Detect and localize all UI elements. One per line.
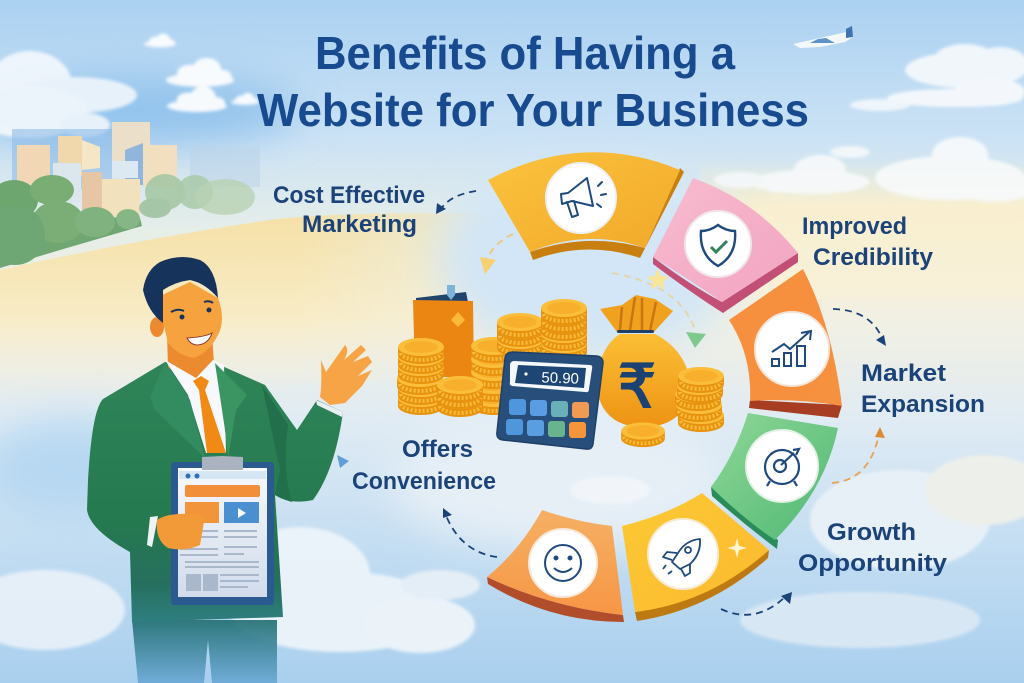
raised hand: [320, 345, 372, 405]
arrow: from rocket: [721, 597, 785, 615]
arrow: center green: [612, 273, 695, 330]
landscape: hills: [0, 213, 469, 368]
background haze behind ring: [390, 160, 740, 550]
lapels: [150, 362, 205, 458]
label: offers convenience: [352, 436, 496, 495]
trousers: [132, 620, 277, 683]
arrow heads: [337, 203, 886, 604]
label: market expansion: [861, 360, 985, 418]
ear: [150, 317, 164, 337]
label: market expansion: Market: [861, 360, 946, 387]
eyes and mouth: [171, 301, 213, 345]
segment: cost effective marketing: [488, 152, 684, 260]
icon: target: [765, 449, 799, 486]
cuff: [316, 400, 343, 417]
arrow: to convenience: [445, 513, 497, 557]
businessman: [87, 257, 372, 683]
dashed arrows: [441, 191, 882, 615]
icon: rocket: [663, 539, 700, 576]
shirt: [165, 360, 226, 453]
title: Benefits of Having a: [315, 27, 735, 79]
label: improved credibility: Improved: [802, 213, 907, 240]
label: offers convenience: Offers: [402, 436, 473, 463]
city skyline: [12, 122, 260, 217]
neck: [167, 335, 214, 385]
segment: growth opportunity rocket: [622, 493, 769, 621]
jacket: [87, 362, 343, 622]
label: improved credibility: Credibility: [813, 244, 934, 271]
label: growth opportunity: Opportunity: [798, 550, 948, 577]
label: cost effective marketing: [273, 182, 425, 238]
segment: growth opportunity: [711, 413, 838, 549]
segment: market expansion: [729, 269, 842, 418]
label: growth opportunity: Growth: [827, 519, 916, 546]
calculator keys: [506, 399, 589, 438]
hair: [143, 257, 218, 323]
icon: sparkle: [727, 538, 747, 558]
title: Website for Your Business: [257, 84, 809, 136]
rupee symbol: ₹: [618, 353, 656, 420]
tie: [193, 376, 226, 453]
labels: [273, 182, 985, 577]
trees: [0, 174, 255, 268]
coin stacks: [397, 299, 587, 417]
wallet: [413, 285, 474, 378]
label: cost effective marketing: Cost Effective: [273, 182, 425, 209]
title: [257, 27, 809, 136]
label: cost effective marketing: Marketing: [302, 211, 417, 238]
arrow: yellow: [486, 234, 513, 260]
face: [162, 282, 222, 358]
label: offers convenience: Convenience: [352, 468, 496, 495]
icon: megaphone: [561, 178, 606, 217]
calculator: [497, 352, 603, 449]
holding hand: [147, 514, 205, 549]
calculator display: 50.90: [541, 369, 579, 388]
arrow: to market expansion: [833, 309, 882, 338]
segment: offers convenience: [487, 510, 624, 622]
clipboard: [171, 456, 274, 605]
arrow: to growth: [832, 434, 879, 483]
icon: smiley: [545, 545, 581, 581]
arrow: to cost effective marketing: [441, 191, 476, 209]
label: market expansion: Expansion: [861, 391, 985, 418]
segment: improved credibility: [653, 178, 798, 313]
right coins: [621, 367, 724, 447]
label: improved credibility: [802, 213, 934, 271]
sleeve shading: [262, 385, 292, 502]
money illustration: [397, 285, 724, 449]
money bag: [597, 295, 690, 427]
plane: [793, 26, 853, 48]
label: growth opportunity: [798, 519, 948, 577]
icon: shield: [701, 225, 735, 266]
icon: growth chart: [772, 331, 811, 366]
